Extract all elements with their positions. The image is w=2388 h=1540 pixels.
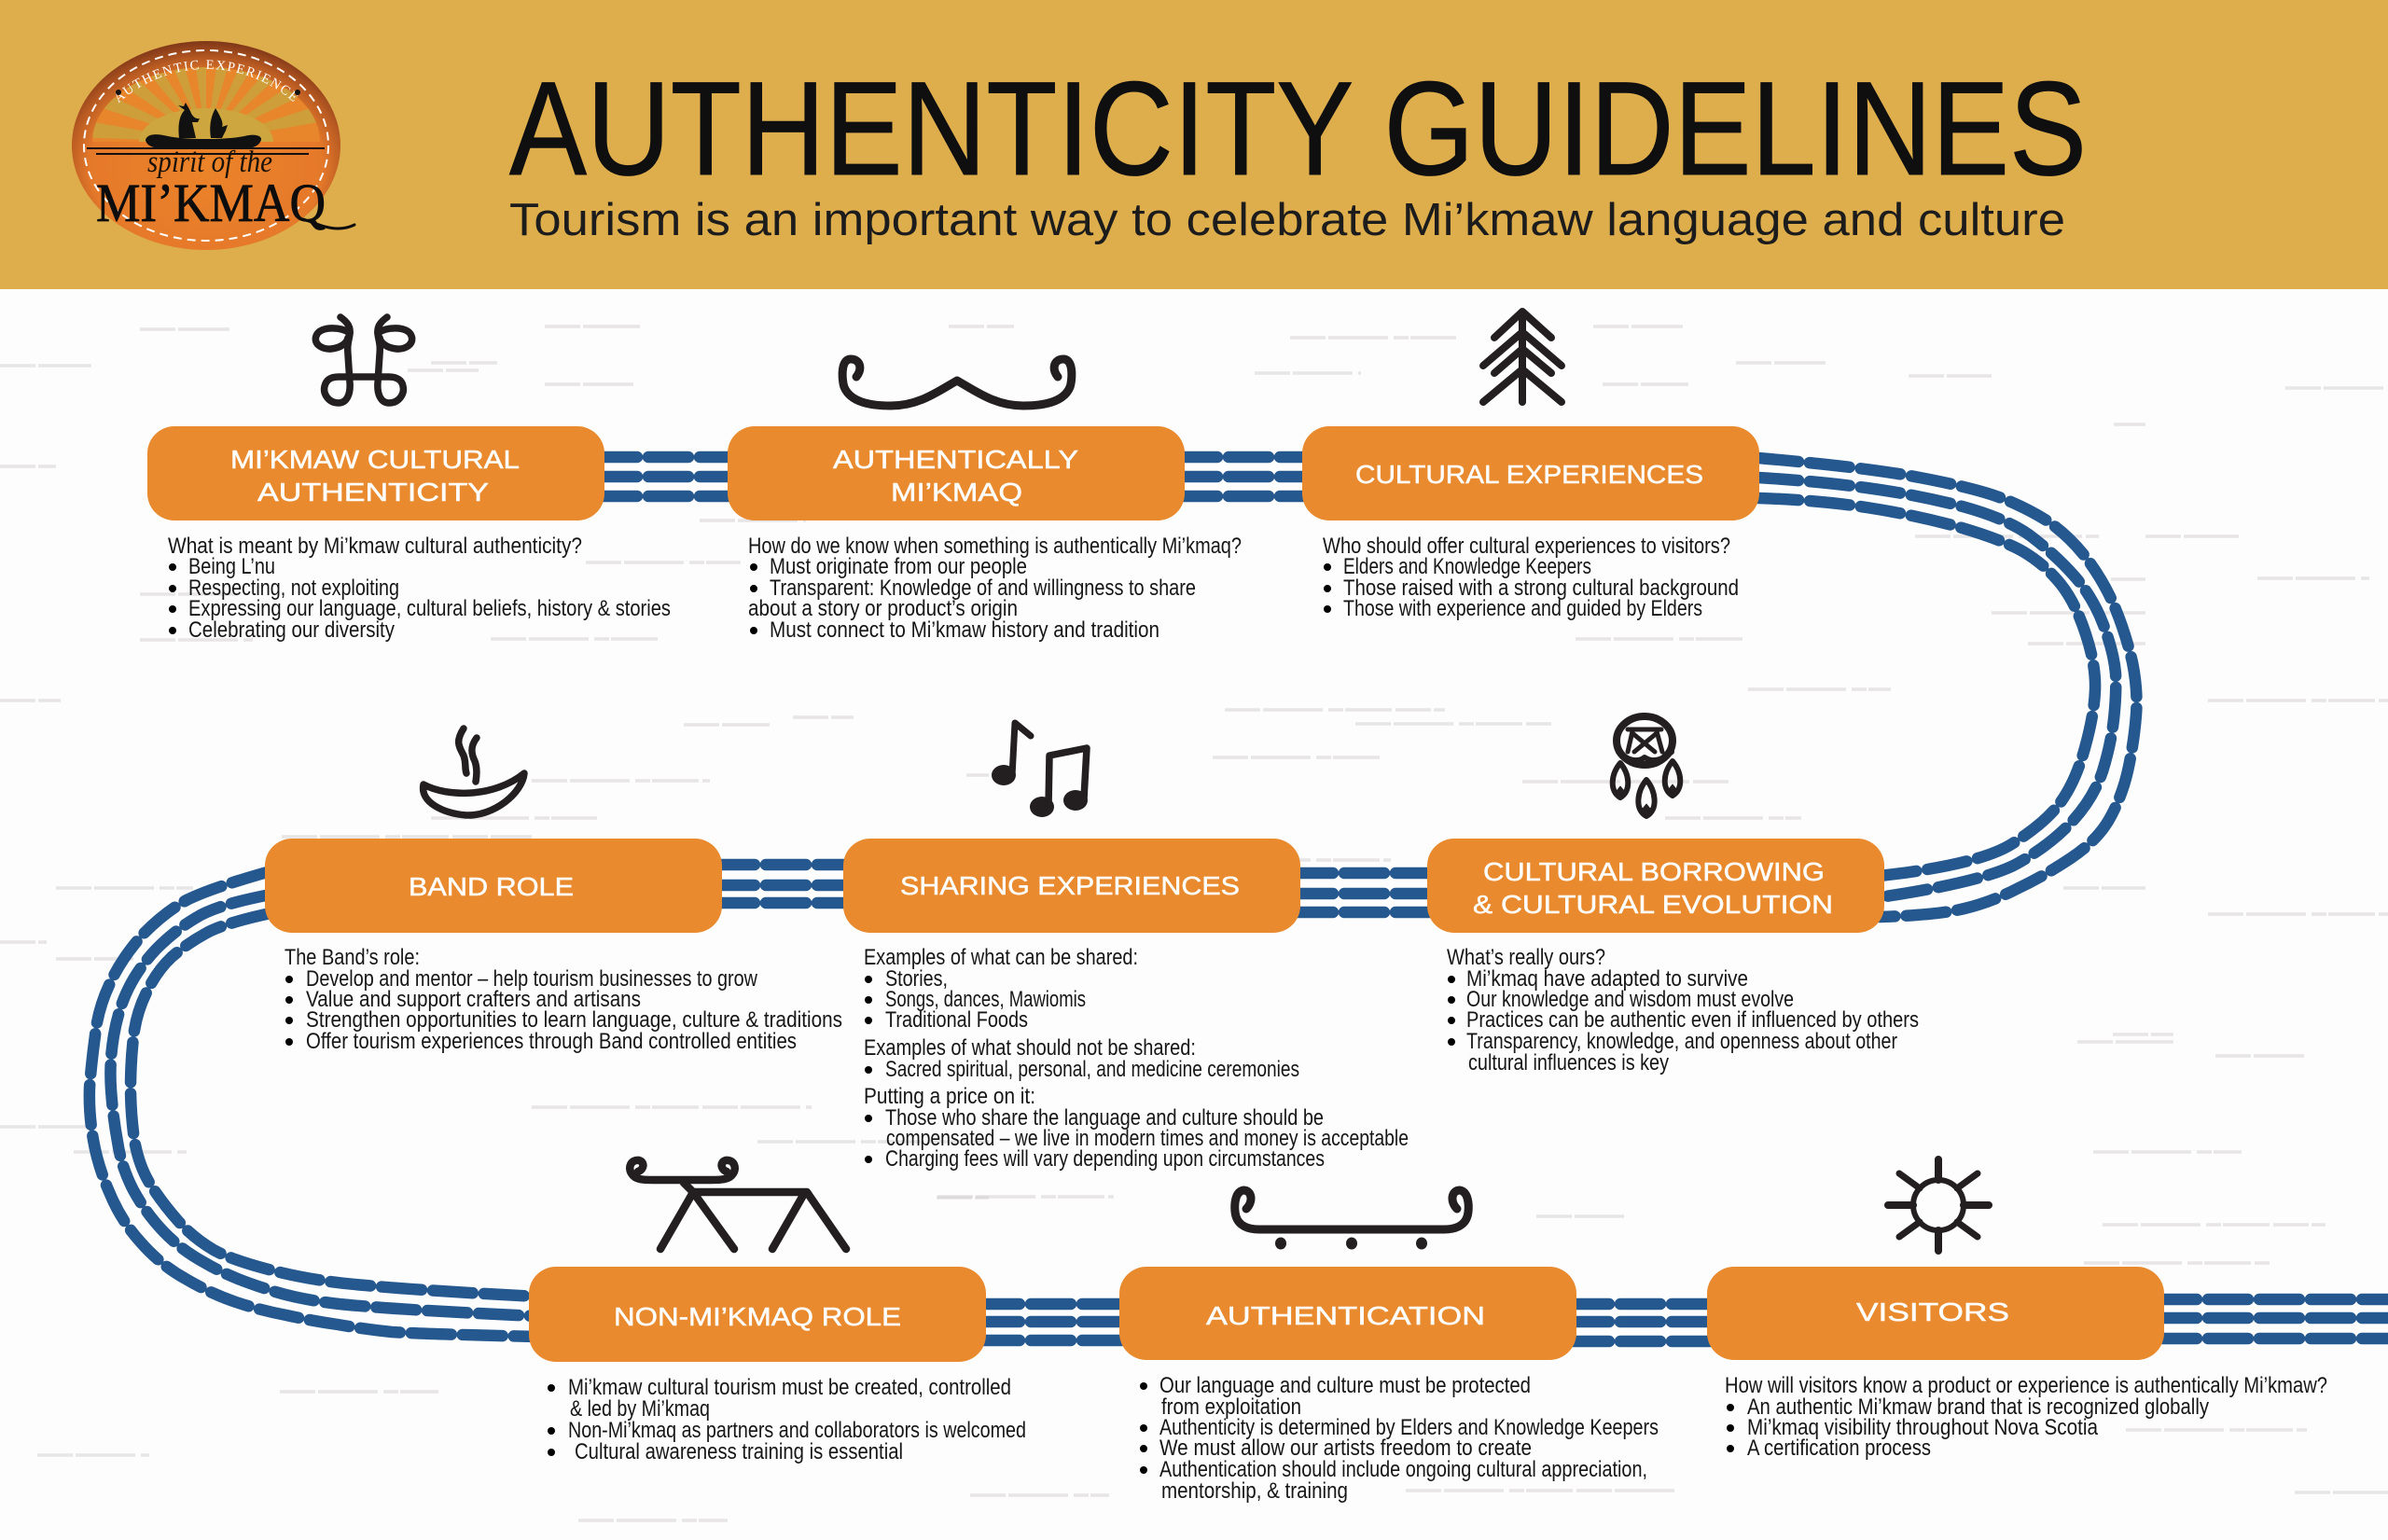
text block: from exploitation	[1161, 1394, 1301, 1420]
heading box	[843, 839, 1300, 933]
text block: Strengthen opportunities to learn language, culture & traditions	[306, 1007, 842, 1033]
text block: Cultural awareness training is essential	[575, 1439, 903, 1464]
text block: Elders and Knowledge Keepers	[1343, 554, 1591, 579]
heading	[1473, 857, 1833, 919]
heading box	[1427, 839, 1884, 933]
panel: non-Mi'kmaq role	[529, 1160, 1026, 1464]
panel: cultural borrowing and evolution	[1427, 716, 1919, 1075]
text block: Examples of what can be shared:	[864, 945, 1138, 970]
logo: spirit of the Mi'kmaq	[72, 41, 356, 250]
heading: AUTHENTICATION	[1206, 1301, 1485, 1330]
text block: Authenticity is determined by Elders and Knowledge Keepers	[1159, 1415, 1659, 1440]
text block: Those raised with a strong cultural background	[1343, 576, 1739, 601]
text block: Those with experience and guided by Elders	[1343, 596, 1702, 621]
text block: What is meant by Mi’kmaw cultural authenticity?	[168, 534, 582, 559]
text block: cultural influences is key	[1468, 1050, 1669, 1075]
heading: AUTHENTICALLY	[833, 445, 1078, 474]
text block: Those who share the language and culture should be	[885, 1105, 1324, 1131]
text block: & led by Mi’kmaq	[570, 1396, 710, 1422]
text block: Transparency, knowledge, and openness about other	[1466, 1029, 1897, 1054]
text block: about a story or product’s origin	[748, 596, 1018, 621]
panel: Mi'kmaw cultural authenticity	[147, 317, 671, 643]
text block	[1140, 1373, 1659, 1504]
heading box	[1707, 1267, 2164, 1360]
text block: Mi’kmaq visibility throughout Nova Scotia	[1747, 1415, 2099, 1440]
heading box	[728, 426, 1185, 520]
text block	[748, 534, 1242, 643]
heading box	[147, 426, 604, 520]
icon: music notes	[992, 723, 1088, 817]
heading box	[529, 1267, 986, 1362]
text block	[548, 1375, 1026, 1464]
river: three-strand beaded path	[90, 457, 2388, 1341]
heading: MI’KMAQ	[891, 478, 1022, 506]
panel: authentication	[1119, 1190, 1659, 1504]
icon: dreamcatcher	[1612, 716, 1681, 816]
text block: Our language and culture must be protected	[1159, 1373, 1531, 1398]
text block: Our knowledge and wisdom must evolve	[1466, 987, 1794, 1012]
text block	[1725, 1373, 2327, 1461]
text block: Songs, dances, Mawiomis	[885, 987, 1086, 1012]
heading: AUTHENTICITY	[257, 478, 489, 506]
heading: & CULTURAL EVOLUTION	[1473, 890, 1833, 919]
heading box	[265, 839, 722, 933]
text block: Authentication should include ongoing cultural appreciation,	[1159, 1457, 1647, 1482]
text block: An authentic Mi’kmaw brand that is recognized globally	[1747, 1394, 2209, 1420]
panel: authentically Mi'kmaq	[728, 359, 1242, 643]
heading: MI’KMAW CULTURAL	[230, 445, 520, 474]
header band	[0, 0, 2388, 289]
text block	[285, 945, 842, 1054]
text block: Expressing our language, cultural beliefs, history & stories	[188, 596, 671, 621]
panel: sharing experiences	[843, 723, 1409, 1172]
icon: double-loop knot	[315, 317, 412, 403]
heading: NON-MI’KMAQ ROLE	[614, 1302, 901, 1331]
icon: pine tree	[1483, 312, 1562, 402]
heading: CULTURAL EXPERIENCES	[1355, 460, 1703, 489]
text block: Offer tourism experiences through Band controlled entities	[306, 1029, 797, 1054]
icon: canoe curve with dots	[1235, 1190, 1468, 1250]
text block: Sacred spiritual, personal, and medicine ceremonies	[885, 1057, 1299, 1082]
icon: moustache curve	[842, 359, 1072, 406]
icon: smoking bowl	[423, 728, 524, 815]
text block: Mi’kmaq have adapted to survive	[1466, 966, 1748, 992]
heading	[833, 445, 1078, 506]
heading: CULTURAL BORROWING	[1483, 857, 1825, 886]
heading: VISITORS	[1856, 1297, 2009, 1326]
panel: cultural experiences	[1302, 312, 1759, 621]
text block: Examples of what should not be shared:	[864, 1035, 1196, 1061]
heading box	[1119, 1267, 1576, 1360]
text block: Value and support crafters and artisans	[306, 987, 641, 1012]
text block: What’s really ours?	[1447, 945, 1605, 970]
text block: Putting a price on it:	[864, 1084, 1035, 1109]
logo: spirit of the Mi'kmaq: MI’KMAQ	[96, 173, 326, 233]
panel: visitors	[1707, 1159, 2327, 1461]
text block: compensated – we live in modern times and money is acceptable	[886, 1126, 1409, 1151]
text block: Respecting, not exploiting	[188, 576, 399, 601]
logo: spirit of the Mi'kmaq: spirit of the	[147, 146, 272, 179]
text block: Who should offer cultural experiences to visitors?	[1323, 534, 1730, 559]
text block: Stories,	[885, 966, 948, 992]
text block: Must connect to Mi’kmaw history and tradition	[770, 617, 1159, 643]
text block: We must allow our artists freedom to create	[1159, 1436, 1532, 1461]
text block	[1323, 534, 1739, 621]
heading box	[1302, 426, 1759, 520]
text block	[1447, 945, 1919, 1075]
text block: Develop and mentor – help tourism businesses to grow	[306, 966, 758, 992]
heading: SHARING EXPERIENCES	[900, 871, 1240, 900]
text block: Traditional Foods	[885, 1007, 1028, 1033]
text block: Celebrating our diversity	[188, 617, 395, 643]
text block: Practices can be authentic even if influenced by others	[1466, 1007, 1919, 1033]
text block: Non-Mi’kmaq as partners and collaborators is welcomed	[568, 1418, 1026, 1443]
text block: Being L’nu	[188, 554, 275, 579]
text block: Transparent: Knowledge of and willingness to share	[770, 576, 1196, 601]
text block: A certification process	[1747, 1436, 1931, 1461]
logo: spirit of the Mi'kmaq: AUTHENTIC EXPERIENCE	[116, 60, 298, 103]
text block	[168, 534, 671, 643]
icon: scrolled bar and triangles	[630, 1160, 846, 1249]
text block: Charging fees will vary depending upon circumstances	[885, 1146, 1325, 1172]
heading: BAND ROLE	[409, 872, 574, 901]
text block: The Band’s role:	[285, 945, 420, 970]
icon: sun	[1888, 1159, 1989, 1251]
panel: band role	[265, 728, 842, 1054]
title: AUTHENTICITY GUIDELINES	[509, 55, 2087, 203]
subtitle: Tourism is an important way to celebrate Mi’kmaw language and culture	[509, 195, 2065, 245]
text block: mentorship, & training	[1161, 1478, 1348, 1504]
text block: Must originate from our people	[770, 554, 1027, 579]
text block	[864, 945, 1409, 1172]
heading	[230, 445, 520, 506]
text block: Mi’kmaw cultural tourism must be created, controlled	[568, 1375, 1011, 1400]
text block: How do we know when something is authentically Mi’kmaq?	[748, 534, 1242, 559]
